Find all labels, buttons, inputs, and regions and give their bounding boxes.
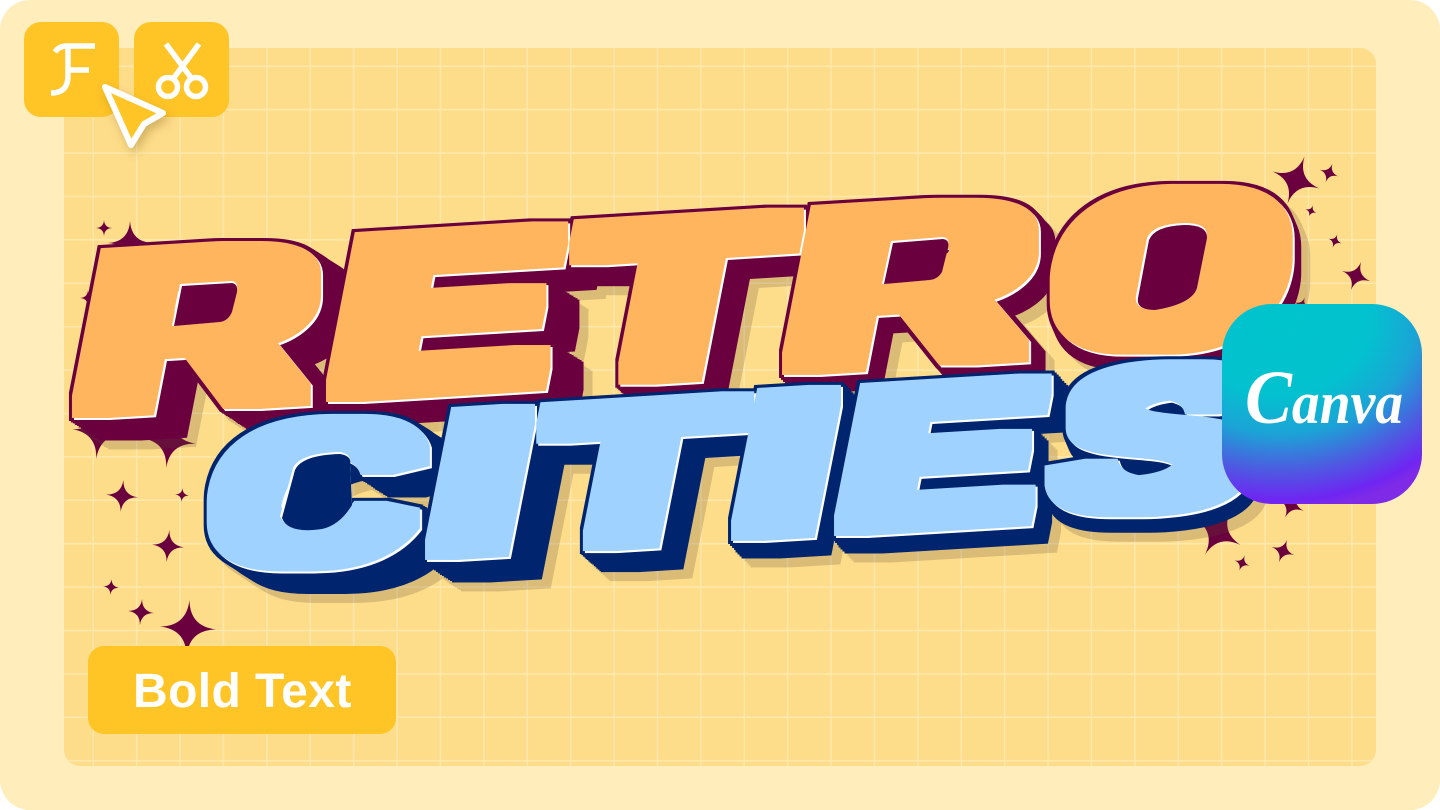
icon: Canva logo: [1222, 304, 1422, 504]
extrusion: RETRO: O: [1041, 144, 1302, 394]
extrusion: RETRO: R: [59, 200, 337, 455]
extrusion: CITIES: I: [715, 351, 857, 574]
title word: CITIES: [191, 324, 1273, 607]
extrusion: CITIES: C: [191, 379, 439, 607]
title word: RETRO: [59, 144, 1302, 455]
extrusion: CITIES: I: [409, 370, 551, 593]
extrusion: CITIES: S: [1037, 324, 1273, 552]
icon: Canva logo: Canva: [1245, 356, 1403, 440]
title word: RETRO: O: [1041, 144, 1302, 394]
icon: font tool: [24, 22, 119, 117]
letter counters: RETRO: [172, 223, 1207, 326]
sparkles: left cluster: [69, 220, 217, 657]
title word: CITIES: E: [822, 341, 1061, 569]
extrusion: RETRO: T: [550, 172, 799, 424]
title word: CITIES: I: [409, 370, 551, 593]
sparkles: right cluster: [1182, 148, 1375, 573]
extrusion: CITIES: T: [519, 359, 750, 586]
extrusion: RETRO: R: [769, 157, 1056, 411]
title word: CITIES: S: [1037, 324, 1273, 552]
title word: RETRO: R: [59, 200, 337, 455]
extrusion: CITIES: [191, 324, 1273, 607]
title word: CITIES: T: [519, 359, 750, 586]
icon: scissors tool: [134, 22, 229, 117]
title word: RETRO: E: [313, 185, 579, 438]
letter counter: C: [280, 452, 352, 530]
icon: cursor arrow: [105, 87, 163, 145]
title word: RETRO: T: [550, 172, 799, 424]
label: Bold Text: Bold Text: [133, 665, 352, 718]
extrusion: RETRO: [59, 144, 1302, 455]
title word: CITIES: C: [191, 379, 439, 607]
label: Bold Text: [88, 646, 396, 734]
extrusion: RETRO: E: [313, 185, 579, 438]
extrusion: CITIES: E: [822, 341, 1061, 569]
title word: RETRO: R: [769, 157, 1056, 411]
title word: CITIES: I: [715, 351, 857, 574]
